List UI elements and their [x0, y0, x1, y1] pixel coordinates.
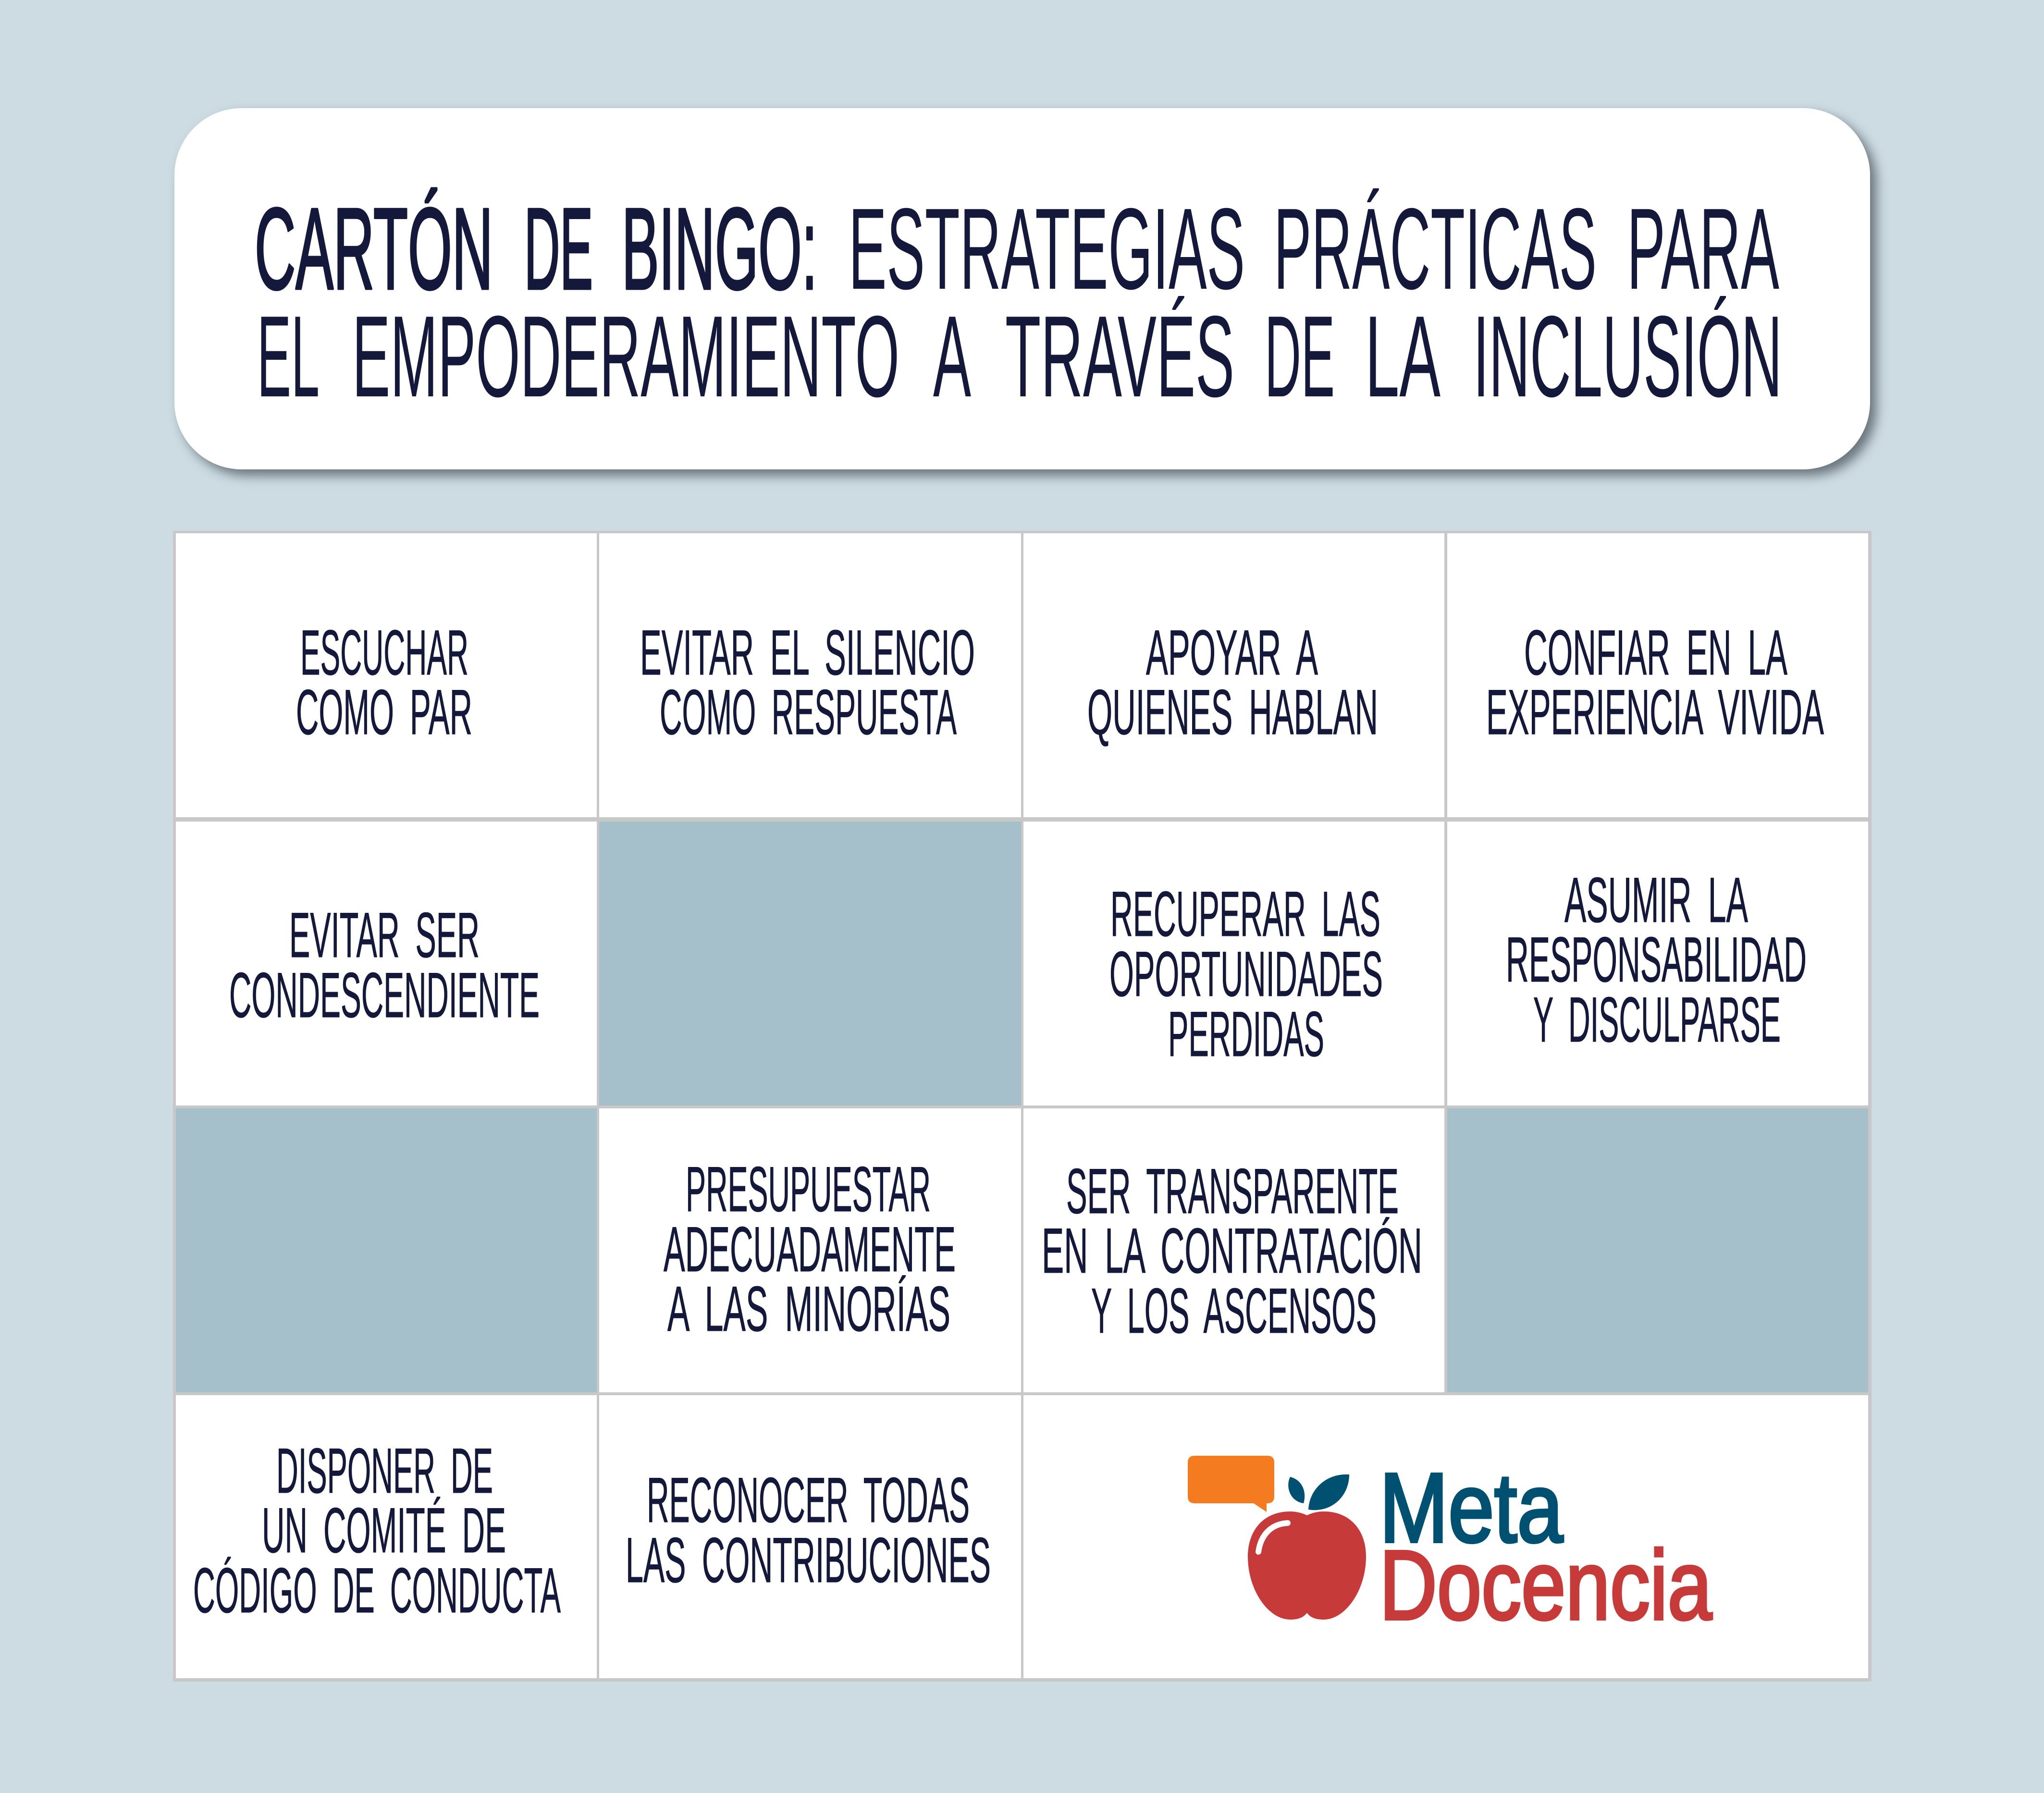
- title: PRÁCTICAS: [1274, 184, 1597, 314]
- title: TRAVÉS: [1005, 292, 1234, 421]
- icon: right leaf: [1308, 1474, 1349, 1510]
- bingo card grid: CÓDIGO DE CONDUCTA: [193, 1555, 561, 1626]
- cell: confiar en la experiencia vivida: CONFIAR EN LA: [1524, 617, 1787, 688]
- cell: asumir la responsabilidad: ASUMIR LA: [1564, 865, 1748, 936]
- empty blue cell: row 3 column 4: [1447, 1108, 1868, 1392]
- bingo card grid: COMO PAR: [296, 677, 472, 748]
- bingo card grid: LAS CONTRIBUCIONES: [626, 1525, 991, 1596]
- empty blue cell: row 2 column 2: [599, 822, 1021, 1105]
- title: BINGO:: [622, 184, 817, 314]
- title: EMPODERAMIENTO: [352, 292, 899, 421]
- bingo card grid: [173, 531, 1872, 1682]
- title: EL: [257, 292, 320, 421]
- logo wordmark: Meta: Meta: [1379, 1453, 1564, 1563]
- cell: presupuestar adecuadamente: PRESUPUESTAR: [686, 1154, 931, 1225]
- icon: left leaf: [1288, 1477, 1305, 1503]
- cell: ser transparente: [1042, 1156, 1422, 1347]
- title: DE: [524, 184, 593, 314]
- cell: reconocer todas las contribuciones: [626, 1465, 991, 1596]
- cell: reconocer todas las contribuciones: RECONOCER TODAS: [647, 1465, 970, 1536]
- cell: asumir la responsabilidad: Y DISCULPARSE: [1533, 984, 1781, 1056]
- cell: evitar el silencio: EVITAR EL SILENCIO: [640, 617, 975, 688]
- title panel: [174, 108, 1870, 469]
- cell: confiar en la experiencia vivida: [1486, 617, 1824, 748]
- bingo card grid: RECUPERAR LAS: [1110, 879, 1380, 950]
- icon: red apple: [1248, 1511, 1366, 1620]
- cell: evitar el silencio: COMO RESPUESTA: [660, 677, 957, 748]
- cell: evitar ser condescendiente: [229, 900, 540, 1031]
- cell: asumir la responsabilidad: [1506, 865, 1807, 1056]
- row 1 cells background: [176, 533, 1868, 1678]
- cell: presupuestar adecuadamente: A LAS MINORÍAS: [667, 1274, 950, 1345]
- logo wordmark: Docencia: Docencia: [1379, 1530, 1712, 1640]
- cell: escuchar como par: [296, 617, 472, 748]
- cell: apoyar a quienes hablan: QUIENES HABLAN: [1087, 677, 1378, 748]
- title: CARTÓN: [255, 184, 493, 314]
- cell: ser transparente: SER TRANSPARENTE: [1066, 1156, 1399, 1227]
- cell: comité de código de conducta: UN COMITÉ DE: [262, 1495, 506, 1566]
- cell: presupuestar adecuadamente: [664, 1154, 956, 1345]
- cell: recuperar las oportunidades perdidas: PERDIDAS: [1168, 999, 1324, 1070]
- title: ESTRATEGIAS: [849, 184, 1245, 314]
- cell: apoyar a quienes hablan: [1087, 617, 1378, 748]
- logo: MetaDocencia: [1188, 1453, 1712, 1640]
- cell: evitar el silencio: [640, 617, 975, 748]
- title: LA: [1365, 292, 1441, 421]
- cell: comité de código de conducta: [193, 1436, 561, 1626]
- cell: comité de código de conducta: DISPONER DE: [276, 1436, 493, 1507]
- bingo card grid: OPORTUNIDADES: [1109, 939, 1383, 1010]
- cell: apoyar a quienes hablan: APOYAR A: [1146, 617, 1318, 688]
- cell: presupuestar adecuadamente: ADECUADAMENTE: [664, 1214, 956, 1285]
- cell: ser transparente: Y LOS ASCENSOS: [1091, 1276, 1377, 1347]
- cell: ser transparente: EN LA CONTRATACIÓN: [1042, 1216, 1422, 1287]
- title: PARA: [1627, 184, 1779, 314]
- cell: recuperar las oportunidades perdidas: [1109, 879, 1383, 1070]
- empty blue cell: row 3 column 1: [176, 1108, 597, 1392]
- cell: evitar ser condescendiente: EVITAR SER: [289, 900, 480, 971]
- bingo card grid: ESCUCHAR: [300, 617, 468, 688]
- title: [255, 184, 1782, 421]
- icon: orange speech bubble: [1188, 1456, 1274, 1512]
- title: A: [933, 292, 971, 421]
- title: DE: [1265, 292, 1335, 421]
- bingo card grid: CONDESCENDIENTE: [229, 960, 540, 1031]
